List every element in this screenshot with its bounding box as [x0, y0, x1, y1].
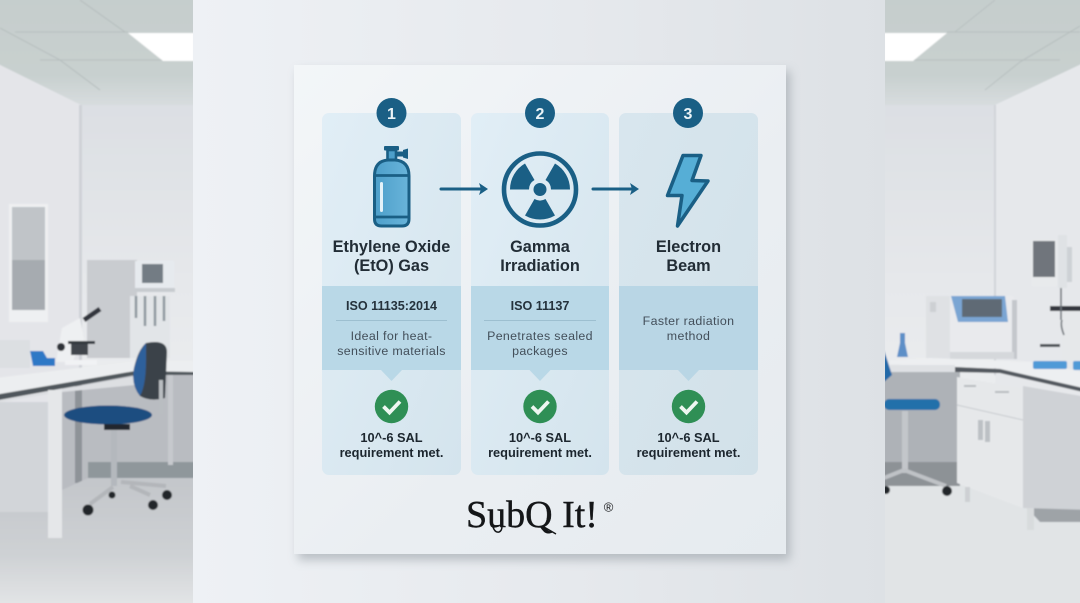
flask — [897, 333, 908, 357]
card 1 title: (EtO) Gas — [354, 257, 429, 275]
left lab chair — [64, 342, 172, 516]
card 1 description: sensitive materials — [337, 344, 446, 358]
logo: SubQ It!: SubQ It! — [466, 494, 598, 536]
blue tray and box — [0, 340, 55, 368]
left lab bench — [0, 361, 194, 538]
card 2 result: requirement met. — [488, 445, 592, 460]
right walls — [884, 105, 996, 475]
right laboratory background — [882, 0, 1080, 603]
icon: lightning bolt — [668, 156, 708, 226]
left ceiling — [0, 0, 194, 105]
right lab bench — [890, 358, 1080, 510]
card 3 pointer — [678, 370, 699, 381]
card 3 title: Beam — [666, 257, 711, 275]
left wall behind desk — [62, 372, 194, 490]
right wall below desk — [884, 372, 960, 464]
card 2 title — [500, 238, 580, 275]
card 3 result: requirement met. — [637, 445, 740, 460]
card 2 check icon — [523, 390, 557, 423]
icon: gas cylinder — [374, 146, 409, 226]
card 1 standard: ISO 11135:2014 — [346, 299, 437, 313]
card 2 title: Gamma — [510, 238, 571, 256]
card 3 description: Faster radiation — [643, 314, 734, 328]
card 1 result: 10^-6 SAL — [360, 430, 423, 445]
card 3: electron beam — [619, 98, 758, 475]
card 3 description — [643, 314, 734, 343]
panel shadow — [298, 71, 790, 560]
card 3 result: 10^-6 SAL — [657, 430, 720, 445]
card 2 title: Irradiation — [500, 257, 580, 275]
card 1 description: Ideal for heat- — [351, 329, 432, 343]
card 3 description band — [619, 286, 758, 370]
card 2 standard band — [471, 286, 609, 370]
card 2 number badge — [525, 98, 555, 128]
central wall — [193, 0, 885, 603]
card 2 result — [488, 430, 592, 460]
card 1 standard band — [322, 286, 461, 370]
card 2 pointer — [530, 370, 550, 381]
wall monitor — [1032, 235, 1080, 361]
card 1 result — [340, 430, 443, 460]
card 3 number badge — [673, 98, 703, 128]
left floor — [0, 478, 194, 603]
card 2 number badge: 2 — [536, 106, 545, 123]
card 1 title — [333, 238, 450, 275]
analyser machine — [87, 260, 175, 358]
icon: radiation symbol — [504, 154, 576, 226]
right ceiling — [884, 0, 1080, 105]
card 2 description: Penetrates sealed — [487, 329, 593, 343]
card 1 number badge — [376, 98, 406, 128]
right ceiling light — [884, 33, 947, 61]
card 3 check icon — [672, 390, 705, 423]
card 1: ethylene oxide — [322, 98, 461, 475]
right cabinet — [957, 377, 1034, 530]
microscope — [56, 309, 100, 365]
card 1 title: Ethylene Oxide — [333, 238, 450, 256]
left window — [9, 204, 48, 322]
right floor — [884, 470, 1080, 603]
logo: SubQ It!: ® — [604, 500, 614, 514]
card 2: gamma irradiation — [471, 98, 609, 475]
card 3 number badge: 3 — [684, 106, 693, 123]
left laboratory background — [0, 0, 194, 603]
analyser with blue screen — [926, 296, 1017, 359]
card 1 pointer — [381, 370, 402, 381]
card 1 check icon — [375, 390, 408, 423]
card 3 description: method — [667, 329, 710, 343]
arrow: step 2 to 3 — [593, 183, 639, 195]
card 2 description — [487, 329, 593, 358]
right lab chair — [882, 350, 952, 496]
main panel — [294, 65, 786, 554]
card 1 description — [337, 329, 446, 358]
left ceiling light — [128, 33, 194, 61]
arrow: step 1 to 2 — [441, 183, 488, 195]
card 2 result: 10^-6 SAL — [509, 430, 571, 445]
left walls — [0, 59, 81, 505]
card 2 standard: ISO 11137 — [511, 299, 569, 313]
card 2 description: packages — [512, 344, 568, 358]
card 3 title: Electron — [656, 238, 721, 256]
card 1 number badge: 1 — [387, 106, 396, 123]
card 1 result: requirement met. — [340, 445, 443, 460]
card 3 title — [656, 238, 721, 275]
card 3 result — [637, 430, 740, 460]
trays — [1033, 344, 1080, 370]
